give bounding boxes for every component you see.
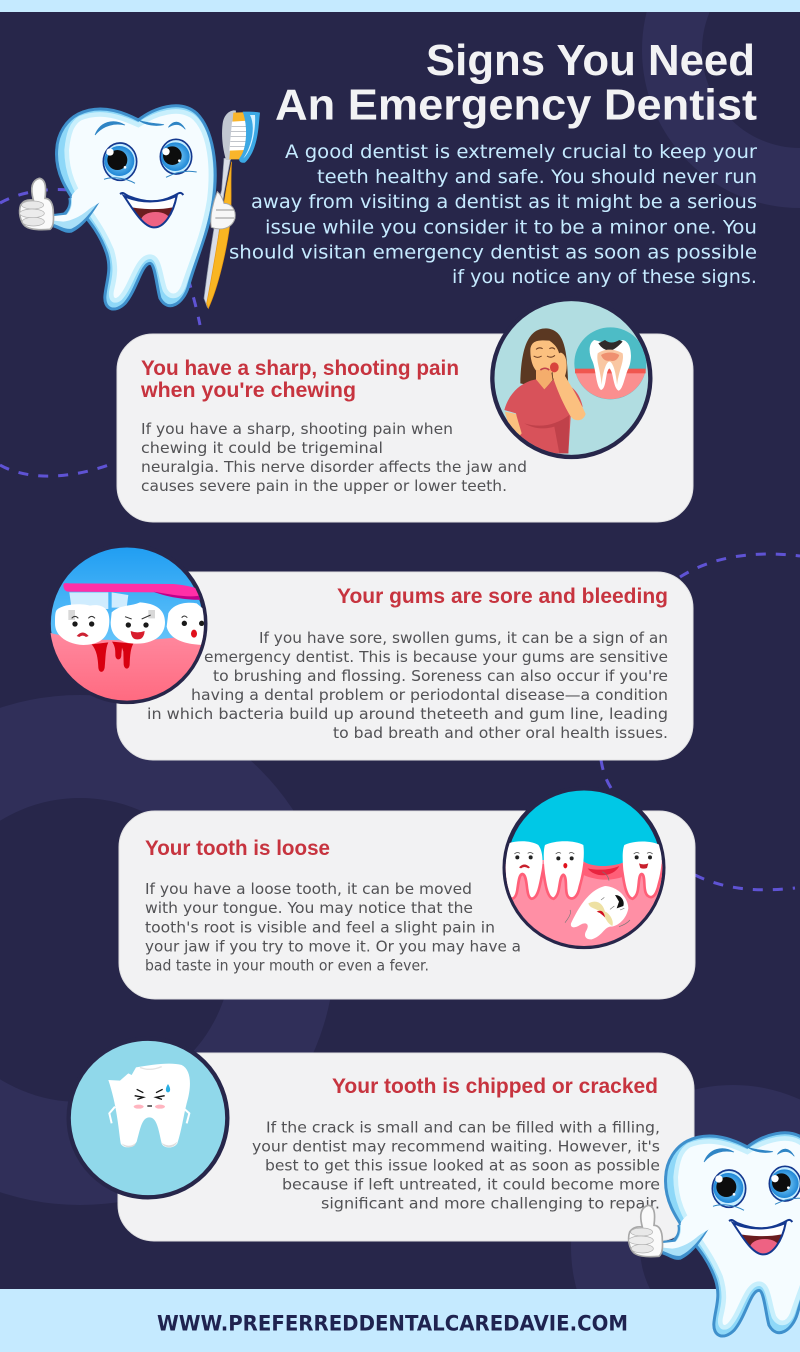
icon: toothbrush: [204, 110, 260, 308]
background ring: lower right: [571, 1085, 800, 1352]
heading: chipped tooth: Your tooth is chipped or cracked: [332, 1075, 658, 1098]
text: sore gums: having a dental problem or periodontal disease—a condition: [191, 686, 668, 704]
dashed path decoration: [0, 190, 800, 890]
icon: woman with toothache: [492, 299, 650, 457]
icon: bleeding gums: [47, 545, 207, 702]
intro text block: [229, 141, 757, 288]
icon: hand on brush: [211, 192, 235, 229]
text: loose tooth: [145, 880, 521, 974]
title: [275, 36, 757, 130]
top strip: [0, 0, 800, 12]
title: Signs You Need: [426, 36, 755, 85]
background ring: lower left: [0, 695, 335, 1205]
footer website url: WWW.PREFERREDDENTALCAREDAVIE.COM: [157, 1312, 628, 1336]
text: loose tooth: with your tongue. You may notice that the: [145, 899, 473, 917]
text: sharp pain: causes severe pain in the upper or lower teeth.: [141, 477, 507, 495]
panel: chipped or cracked tooth: [118, 1053, 694, 1241]
icon: chipped tooth: [69, 1039, 227, 1197]
mascot: tooth with toothbrush: [20, 106, 260, 309]
heading: loose tooth: Your tooth is loose: [145, 837, 330, 860]
text: loose tooth: If you have a loose tooth, it can be moved: [145, 880, 472, 898]
text: chipped tooth: best to get this issue looked at as soon as possible: [265, 1156, 660, 1174]
intro text block: A good dentist is extremely crucial to keep your: [285, 141, 757, 163]
background ring: top right: [642, 0, 800, 208]
text: loose tooth: your jaw if you try to move it. Or you may have a: [145, 938, 521, 956]
intro text block: away from visiting a dentist as it might be a serious: [251, 191, 757, 213]
text: sharp pain: chewing it could be trigeminal: [141, 439, 383, 457]
heading: sore gums: Your gums are sore and bleeding: [337, 585, 668, 608]
text: loose tooth: tooth's root is visible and feel a slight pain in: [145, 918, 495, 936]
text: sore gums: [147, 629, 668, 742]
footer band: [0, 1289, 800, 1352]
text: sharp pain: [141, 420, 527, 495]
text: sore gums: emergency dentist. This is because your gums are sensitive: [204, 648, 668, 666]
intro text block: should visitan emergency dentist as soon as possible: [229, 242, 757, 264]
text: chipped tooth: your dentist may recommend waiting. However, it's: [252, 1138, 660, 1156]
heading: sharp pain: [140, 357, 459, 402]
heading: sharp pain: You have a sharp, shooting pain: [141, 357, 459, 380]
text: sharp pain: If you have a sharp, shooting pain when: [141, 420, 453, 438]
text: chipped tooth: because if left untreated, it could become more: [282, 1176, 660, 1194]
text: loose tooth: bad taste in your mouth or even a fever.: [145, 956, 429, 974]
panel: sharp shooting pain: [117, 334, 693, 522]
text: sore gums: If you have sore, swollen gums, it can be a sign of an: [259, 629, 668, 647]
text: sharp pain: neuralgia. This nerve disorder affects the jaw and: [141, 458, 527, 476]
icon: loose tooth: [502, 788, 665, 950]
panel: loose tooth: [119, 811, 695, 999]
title: An Emergency Dentist: [275, 80, 757, 130]
text: chipped tooth: significant and more challenging to repair.: [321, 1194, 660, 1212]
heading: sharp pain: when you're chewing: [140, 379, 356, 402]
text: sore gums: in which bacteria build up around theteeth and gum line, leading: [147, 705, 668, 723]
panel: sore gums: [117, 572, 693, 760]
text: sore gums: to brushing and flossing. Soreness can also occur if you're: [213, 667, 668, 685]
text: chipped tooth: If the crack is small and can be filled with a filling,: [266, 1118, 660, 1136]
text: sore gums: to bad breath and other oral health issues.: [333, 724, 668, 742]
text: chipped tooth: [252, 1118, 660, 1212]
intro text block: if you notice any of these signs.: [452, 266, 757, 288]
intro text block: teeth healthy and safe. You should never run: [317, 166, 757, 188]
mascot: tooth thumbs up, bottom right: [629, 1133, 800, 1336]
intro text block: issue while you consider it to be a minor one. You: [265, 216, 757, 238]
